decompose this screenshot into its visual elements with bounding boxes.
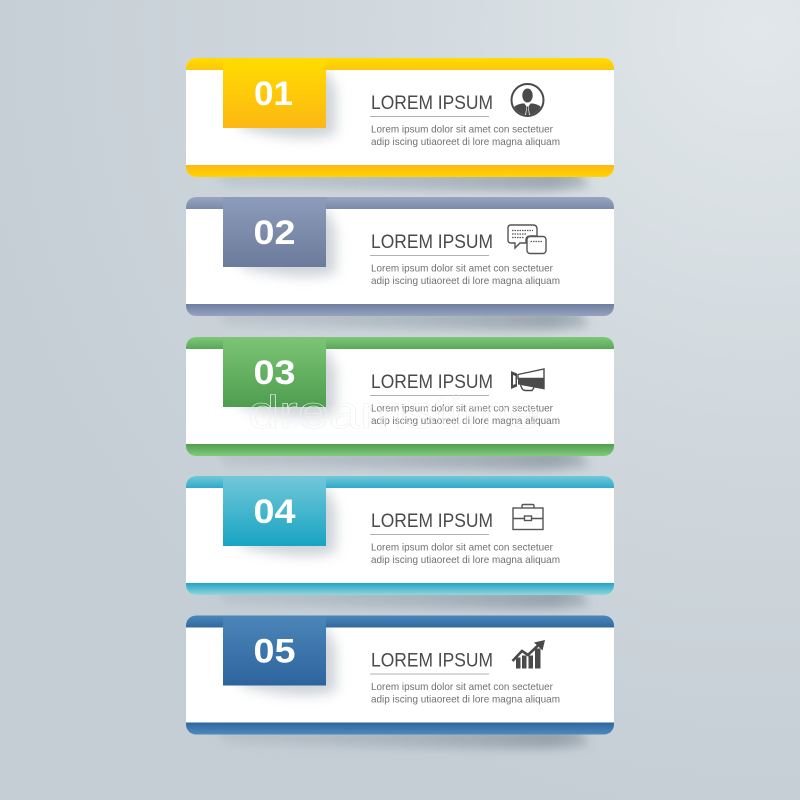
number tab 01: 01 [254, 75, 293, 113]
icon: growth chart [512, 640, 545, 668]
card body 01 [186, 58, 614, 177]
tab shadow 05 [240, 628, 336, 695]
card body 04 [186, 476, 614, 595]
heading rule 04 [370, 534, 489, 535]
body text 01 [371, 124, 560, 148]
bottom band 05 [186, 722, 614, 734]
card shadow 04 [215, 588, 590, 609]
bottom band 03 [186, 444, 614, 456]
body text 01: Lorem ipsum dolor sit amet con sectetuer [371, 124, 553, 136]
body text 01: adip iscing utiaoreet di lore magna aliquam [371, 136, 560, 148]
body text 05: adip iscing utiaoreet di lore magna aliquam [371, 694, 560, 706]
heading 01: LOREM IPSUM [371, 93, 493, 114]
icon: megaphone [511, 369, 545, 390]
watermark: dreamstime [248, 386, 540, 438]
number tab 04: 04 [254, 493, 296, 531]
top band 03 [186, 337, 614, 349]
number tab 04 [223, 476, 326, 546]
card shadow 02 [215, 309, 590, 330]
number tab 01 [223, 58, 326, 128]
body text 02 [371, 262, 560, 287]
card body 02 [186, 197, 614, 316]
tab shadow 04 [240, 488, 336, 556]
number tab 03 [223, 337, 326, 407]
bottom band 01 [186, 165, 614, 177]
heading 03: LOREM IPSUM [371, 372, 493, 393]
body text 02: Lorem ipsum dolor sit amet con sectetuer [371, 262, 553, 274]
bottom band 04 [186, 583, 614, 595]
top band 05 [186, 616, 614, 628]
bottom band 02 [186, 304, 614, 316]
body text 03: Lorem ipsum dolor sit amet con sectetuer [371, 402, 553, 414]
heading 02: LOREM IPSUM [371, 232, 493, 253]
heading 04: LOREM IPSUM [371, 511, 493, 532]
number tab 05 [223, 616, 326, 686]
number tab 02: 02 [254, 214, 296, 252]
card body 03 [186, 337, 614, 456]
panel: step 05 [186, 616, 614, 749]
body text 04: adip iscing utiaoreet di lore magna aliquam [371, 554, 560, 566]
number tab 03: 03 [254, 354, 296, 392]
card shadow 05 [215, 728, 590, 749]
body text 05 [371, 681, 560, 706]
card body 05 [186, 616, 614, 734]
card shadow 01 [215, 170, 590, 191]
heading rule 01 [370, 116, 489, 117]
card shadow 03 [215, 449, 590, 470]
body text 05: Lorem ipsum dolor sit amet con sectetuer [371, 681, 553, 693]
heading rule 02 [370, 255, 489, 256]
tab shadow 03 [240, 349, 336, 417]
panel: step 04 [186, 476, 614, 609]
icon: briefcase [513, 504, 543, 530]
icon: businessman [512, 84, 544, 118]
body text 04: Lorem ipsum dolor sit amet con sectetuer [371, 542, 553, 554]
icon: speech bubbles [508, 225, 546, 254]
tab shadow 01 [240, 70, 336, 138]
tab shadow 02 [240, 209, 336, 277]
body text 02: adip iscing utiaoreet di lore magna aliquam [371, 275, 560, 287]
body text 04 [371, 542, 560, 566]
top band 01 [186, 58, 614, 70]
heading rule 03 [370, 395, 489, 396]
number tab 02 [223, 197, 326, 267]
panel: step 03 [186, 337, 614, 470]
heading 05: LOREM IPSUM [371, 650, 493, 672]
heading rule 05 [370, 674, 489, 675]
panel: step 01 [186, 58, 614, 191]
panel: step 02 [186, 197, 614, 330]
body text 03 [371, 402, 560, 427]
top band 02 [186, 197, 614, 209]
number tab 05: 05 [254, 632, 296, 670]
top band 04 [186, 476, 614, 488]
body text 03: adip iscing utiaoreet di lore magna aliquam [371, 415, 560, 427]
